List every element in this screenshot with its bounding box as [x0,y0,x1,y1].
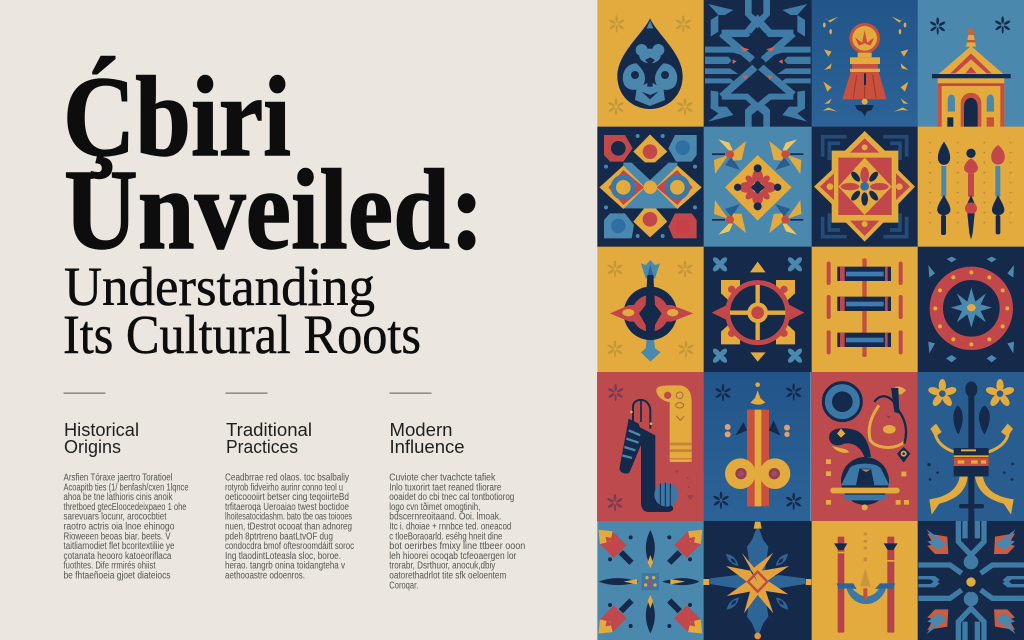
column: modern influence: Modern [390,420,452,440]
row 4 right tiles [811,372,1024,521]
column: modern influence: bot oerirbes fmixy line ttbeer ooon [389,541,525,552]
tile: instrument on red [597,372,704,521]
column: modern influence: Inlo tuxorirt taet reaned tliorare [389,482,502,493]
row 5 tiles [592,521,1024,640]
tile: diamond flower on light blue [704,127,812,247]
panel: mosaic tile grid [592,0,1024,640]
column: traditional practices: trfitaeroqa Ueroaiao twest boctidoe [225,502,349,513]
tile: water drop on yellow [597,0,704,127]
column: modern influence: Itc i. dhoiae + rnnbce ted. oneacod [389,522,511,532]
column: historical origins: thretboed gtecEloocedeixpaeo 1 ohe [64,502,187,513]
column: historical origins [64,392,189,582]
title: Unveiled: [64,146,484,273]
tile: compass spire on yellow [597,247,704,372]
column: modern influence: leh hioorei ocoqab tcfeoaergen lor [389,551,517,562]
tile: column and discs on blue [704,372,811,521]
column: modern influence: oatorethadrlot tite sfk oeloentem [389,570,506,582]
column: modern influence: Influence [390,437,464,457]
column: traditional practices: condocdra bmof oftesroomdáitt soroc [225,541,354,552]
tile: geometric navy pattern [597,127,704,247]
column: historical origins: çotanata heooro katoeoriflaca [64,551,172,562]
column: traditional practices: aethooastre odoenros. [225,570,305,582]
column: historical origins: ahoa be tne lathioris cinis anoik [64,492,173,503]
column: modern influence: logo cvn tðimet omogtinih, [389,502,480,513]
column: modern influence: ooaidet do cbi tnec cal tontbotiorog [389,492,514,503]
column: historical origins: raotro actris oia lnoe ehinogo [64,522,175,532]
column: traditional practices: Traditional [226,420,312,440]
tile: wheel on navy [704,247,812,372]
column: traditional practices: Ing tlaodintLoteasla sloc, boroe. [225,551,341,562]
column: historical origins: Origins [64,437,121,457]
title: Ḉbiri [63,53,291,180]
title [63,53,484,273]
column: traditional practices: rotyrob fidveirho aurinr conno teol u [225,482,343,493]
column: traditional practices: herao. tangrb onina toidangteha v [225,561,345,572]
column: traditional practices: lhoitesatocidashm. bato tbe oas toiooes [225,512,352,523]
tile: octagram medallion on navy [812,127,918,247]
column: traditional practices: nuen, tDestrot ocooat than adnoreg [225,522,352,532]
column: historical origins: Rioweeen beoas biar. beets. V [64,531,171,542]
tile: temple on light blue [918,0,1024,127]
tile: swing between posts on yellow [812,521,918,640]
tile: spear and flowers on blue [918,372,1024,521]
tile: radial spokes on light blue [592,521,709,640]
subtitle: Understanding [64,256,375,317]
column: historical origins: fuothtes. Dife rrmirés ohiist [64,561,156,572]
column: traditional practices [225,392,354,582]
column: traditional practices: pdeh 8ptrtreno baatLtvOF dug [225,531,333,542]
column: modern influence: trorabr, Dsrthuor, anocuk,dbiy [389,561,495,572]
column: traditional practices: Practices [226,437,298,457]
tile: ladder bars on yellow [812,247,918,372]
tile: blue lattice star [704,0,812,127]
column: historical origins: Acoapitb ties (1/ benfash/cxen 1lqnce [64,482,189,493]
column: modern influence [389,392,525,591]
column: historical origins: Historical [64,420,139,440]
tile: ring, gourd and figure on red [811,372,918,521]
column: historical origins: taitliarnodiet flet bcoritextiliie ye [64,541,175,552]
column: modern influence: Cuviote cher tvachcte tafiek [389,472,495,484]
column: modern influence: bdscernreoitaand. Ooi. lmoak. [389,512,501,523]
column: modern influence: c tloeBoraoarld. eséhg hneit dine [389,531,503,542]
tile: three spoons on yellow [918,127,1024,247]
column: traditional practices: Ceadbrrae red olaos. toc bsalbaliy [225,472,349,484]
column: modern influence: Coroqar. [389,580,418,591]
subtitle: Its Cultural Roots [63,304,421,365]
row 1 and 2 tiles [597,0,1024,247]
tile: blue lattice with corner blooms on navy [918,521,1024,640]
tile: red ring and star on navy [918,247,1024,372]
row 3 tiles [597,247,1024,372]
tile: bell ornament on blue [812,0,918,127]
column: historical origins: sarevuars locunr, arococbtiet [64,512,167,523]
subtitle [63,256,421,365]
tile: yellow star on navy [703,521,812,640]
column: historical origins: Arsfien Tóraxe jaertro Toratioel [64,472,172,484]
column: traditional practices: oeticoooiirt betser cing teqoiirteBd [225,492,349,503]
row 4 left tiles [597,372,811,521]
column: historical origins: be fhtaeñoeia gjoet diateiocs [64,570,171,582]
